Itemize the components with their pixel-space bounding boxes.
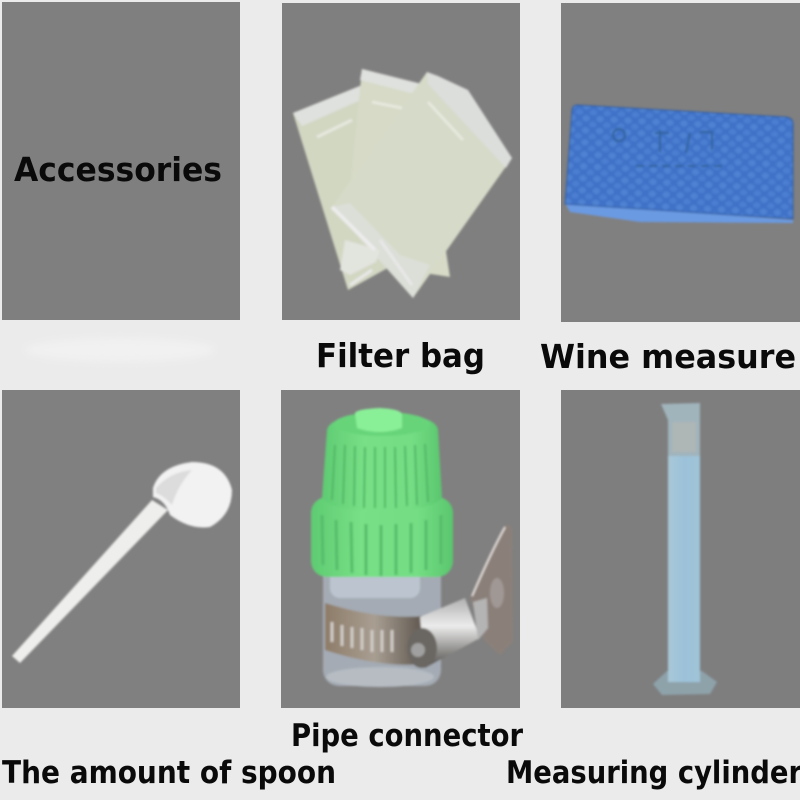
- icon: pipe connector: [311, 408, 513, 687]
- clear tube: [323, 560, 441, 686]
- icon: blue measure box: [565, 105, 793, 223]
- label: the amount of spoon: The amount of spoon: [2, 755, 336, 791]
- green ring: [311, 497, 453, 577]
- icon: measuring cylinder: [653, 403, 717, 695]
- green cap: [322, 414, 442, 511]
- label: wine measure: Wine measure: [540, 337, 796, 376]
- clamp: [420, 598, 480, 668]
- panel: filter bag: [282, 3, 520, 320]
- panel: pipe connector: [281, 390, 520, 708]
- panel: measuring cylinder: [561, 390, 800, 708]
- panel: accessories: [2, 2, 240, 320]
- label: pipe connector: Pipe connector: [291, 718, 524, 754]
- metal wing: [470, 525, 513, 655]
- icon: filter bags: [293, 69, 512, 298]
- panel: spoon: [2, 390, 240, 708]
- panel: wine measure: [561, 3, 800, 322]
- icon: measuring spoon: [12, 462, 232, 663]
- label: filter bag: Filter bag: [316, 336, 485, 375]
- metal band: [325, 603, 424, 665]
- heading: accessories: Accessories: [14, 150, 222, 189]
- faint smudge: [25, 338, 215, 362]
